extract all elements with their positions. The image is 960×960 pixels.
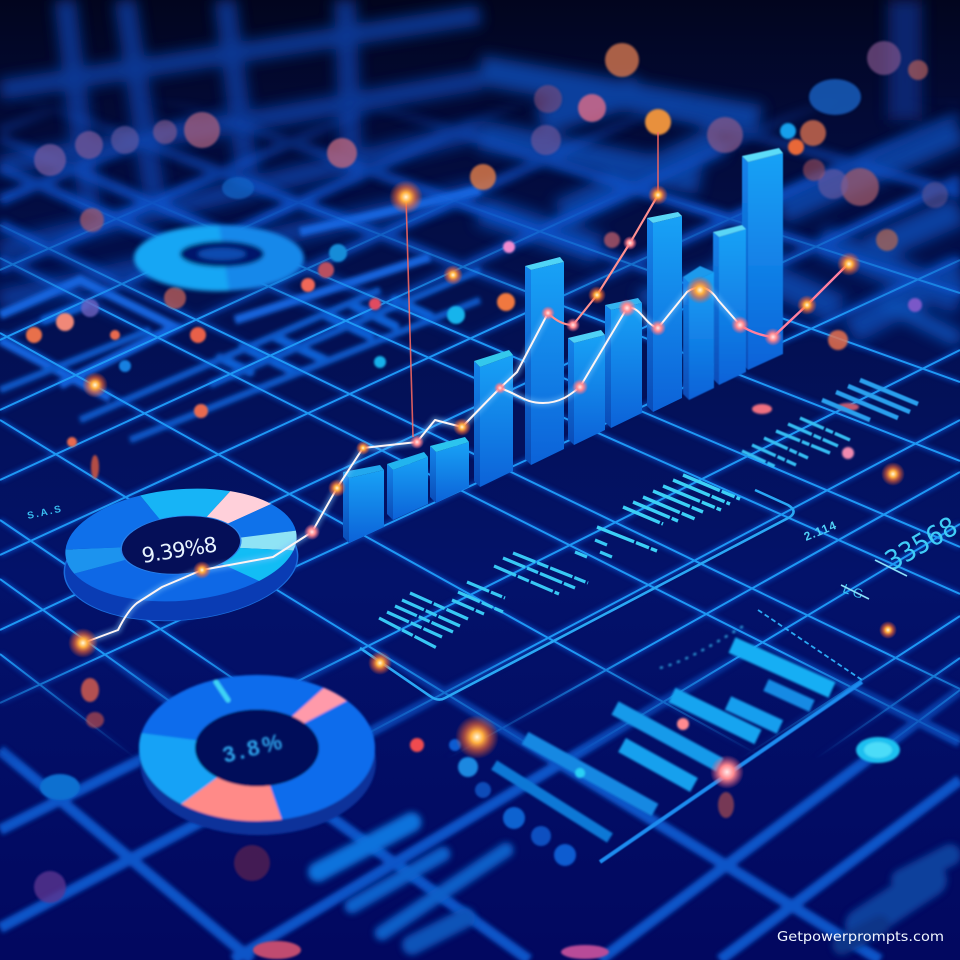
stroke detail: [841, 560, 907, 599]
glowing data nodes: [68, 180, 905, 789]
sharp grid: [0, 205, 960, 752]
bar 5: [525, 257, 564, 465]
bar 6: [568, 330, 605, 445]
icon: cyan node: [856, 737, 900, 763]
donut side: [60, 498, 302, 630]
donut top segments: [167, 692, 347, 804]
blurred far haze bands: [0, 0, 960, 340]
lower donut value: 3.8%: [220, 729, 284, 768]
blurred foreground pills: [318, 822, 950, 945]
bars: [494, 625, 832, 838]
panel: lower bar table: [494, 610, 862, 862]
bar 2: [387, 452, 428, 520]
donut side: [140, 689, 376, 835]
donut tick: [216, 682, 228, 700]
donut top segments: [90, 495, 272, 595]
bar 9: [683, 266, 714, 400]
bar 3: [430, 437, 469, 503]
panel: right text table: [742, 380, 918, 467]
icon: donut chart main: [60, 495, 302, 630]
blurred far grid: [0, 104, 960, 333]
icon: donut chart lower: [140, 682, 376, 835]
donut value: 9.39%8: [140, 532, 219, 568]
bar 1: [343, 465, 384, 543]
bar 8: [647, 212, 682, 412]
small glyphs: L G: [841, 581, 865, 602]
small label left: S.A.S: [26, 504, 64, 522]
small readout: 2.114: [802, 518, 839, 544]
bar 4: [474, 350, 513, 487]
line chart: white line: [83, 288, 740, 643]
data text rows upper: [597, 475, 740, 551]
line chart: orange branch: [548, 195, 847, 337]
icon: far donut: [134, 225, 304, 291]
watermark: Getpowerprompts.com: [777, 930, 944, 945]
bar 7: [605, 298, 642, 428]
blurred mid table bands: [0, 190, 480, 440]
chart: 3D bar chart: [343, 148, 783, 543]
line chart: vertical spikes: [406, 132, 658, 437]
panel: central text table: [360, 475, 794, 700]
blurred near grid: [0, 650, 960, 960]
line chart: glow: [83, 288, 740, 643]
bar 11: [742, 148, 783, 370]
bar 10: [713, 225, 746, 385]
panel: right numeric readout: [802, 511, 960, 602]
data text rows lower: [379, 540, 612, 648]
